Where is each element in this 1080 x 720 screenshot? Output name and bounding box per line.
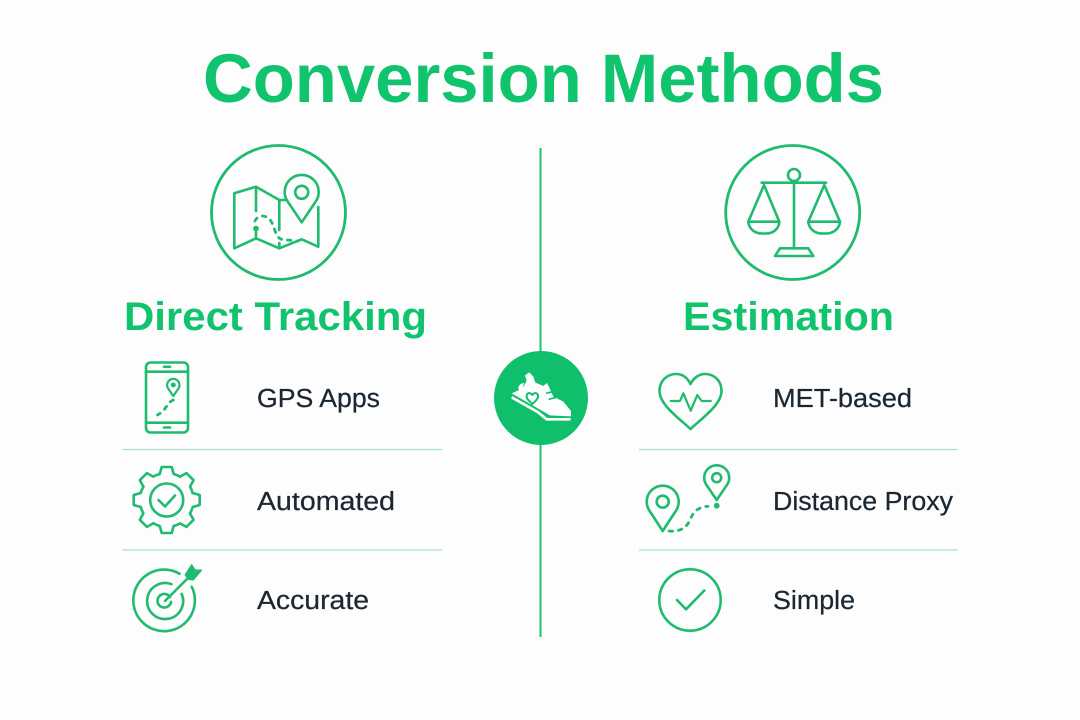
divider [639,448,958,450]
row: simple [659,569,855,631]
icon: running shoe badge [494,351,588,445]
icon: phone with route [146,362,188,432]
label: gps apps: GPS Apps [257,385,380,413]
panel: estimation [639,146,958,631]
icon: gear with check [134,467,200,533]
row: met-based [660,374,912,429]
label: automated: Automated [257,488,395,516]
icon: map with location pin [212,146,346,280]
heading: direct tracking: Direct Tracking [124,295,427,339]
divider [639,549,958,551]
row: distance proxy [647,465,953,531]
icon: check circle [659,569,721,631]
label: met-based: MET-based [773,385,912,413]
icon: two pins with route [647,465,729,531]
divider [122,549,442,551]
heading: estimation: Estimation [683,295,894,339]
row: automated [134,467,395,533]
row: gps apps [146,362,380,432]
divider [122,448,442,450]
center vertical divider [540,148,542,637]
label: distance proxy: Distance Proxy [773,488,953,516]
panel: direct tracking [122,146,442,631]
label: accurate: Accurate [257,587,369,615]
icon: heart with pulse [660,374,722,429]
label: simple: Simple [773,587,855,615]
icon: balance scale [726,146,860,280]
row: accurate [133,564,369,631]
icon: target with arrow [133,564,202,631]
title: Conversion Methods [203,40,884,117]
